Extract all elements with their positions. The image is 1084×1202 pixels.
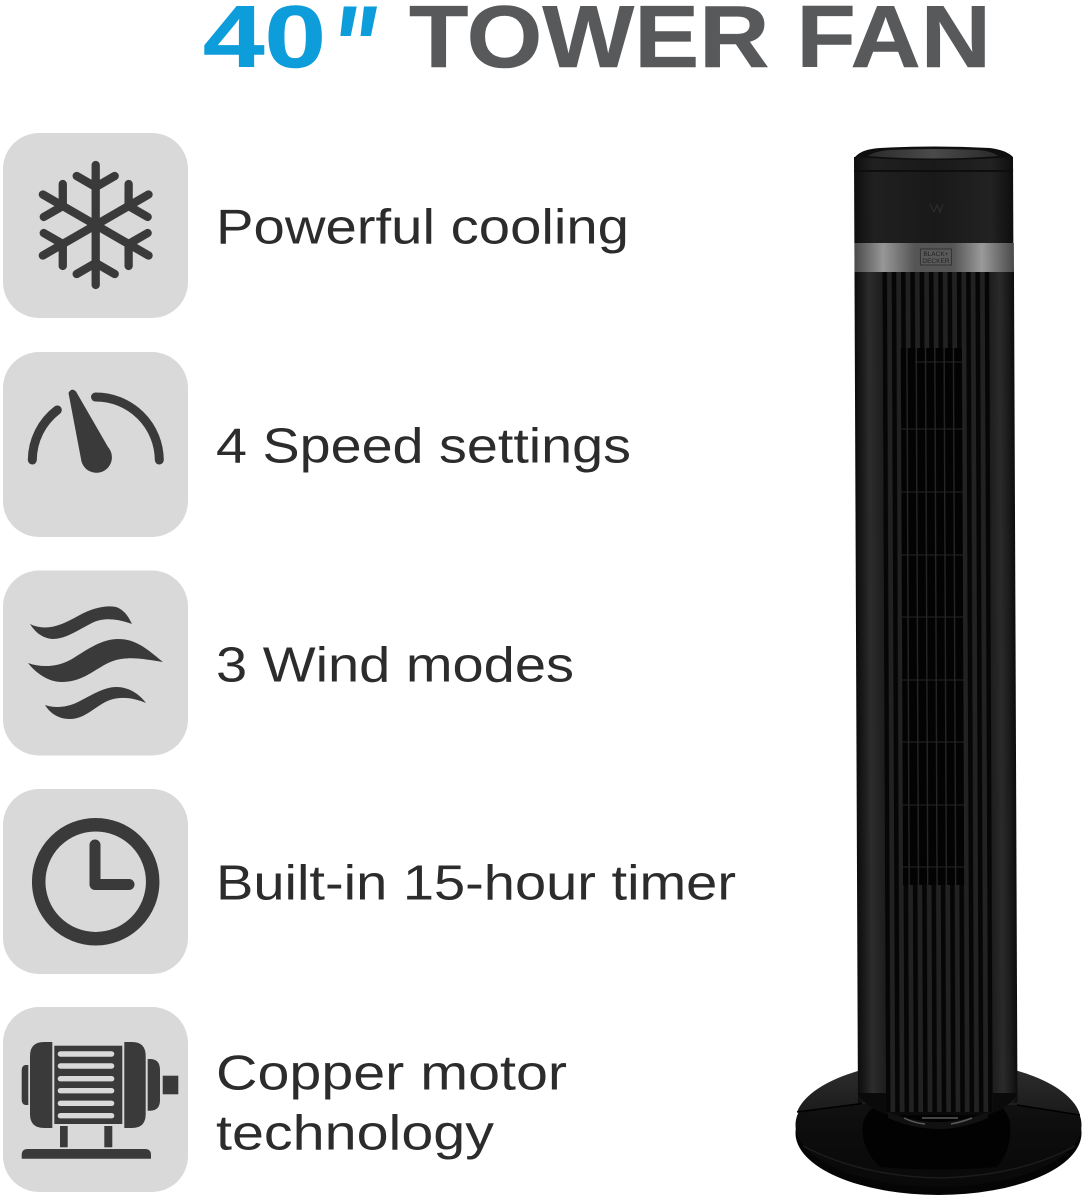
feature: copper motor technology: Copper motor [216, 1046, 567, 1100]
title [203, 0, 991, 114]
icon: wind waves [28, 606, 163, 719]
feature: copper motor technology: technology [216, 1106, 495, 1160]
logo plate: BLACK+ [923, 251, 949, 258]
icon: electric motor [22, 1042, 178, 1159]
fan column [854, 157, 1018, 1115]
power button icon [930, 204, 943, 212]
feature: 15-hour timer [3, 789, 736, 974]
air outlet window [901, 348, 965, 885]
column foot [888, 1112, 988, 1129]
feature: 15-hour timer: Built-in 15-hour timer [216, 856, 736, 910]
feature: wind modes: 3 Wind modes [216, 638, 574, 692]
rib grille [882, 272, 993, 1112]
feature: powerful cooling [3, 133, 629, 318]
fan base [796, 1060, 1082, 1195]
logo plate [920, 249, 951, 265]
icon: clock [39, 825, 153, 939]
silver band [854, 243, 1014, 272]
top cap [854, 157, 1013, 243]
feature: speed settings: 4 Speed settings [216, 420, 631, 474]
icon: speed gauge [32, 390, 159, 473]
product photo: tower fan [796, 146, 1082, 1195]
feature: speed settings [3, 352, 631, 537]
icon: snowflake [33, 165, 158, 285]
feature: copper motor technology [3, 1007, 567, 1192]
feature: wind modes [3, 570, 574, 756]
feature: powerful cooling: Powerful cooling [216, 200, 629, 254]
top lid [855, 146, 1013, 160]
logo plate: DECKER [922, 258, 950, 265]
